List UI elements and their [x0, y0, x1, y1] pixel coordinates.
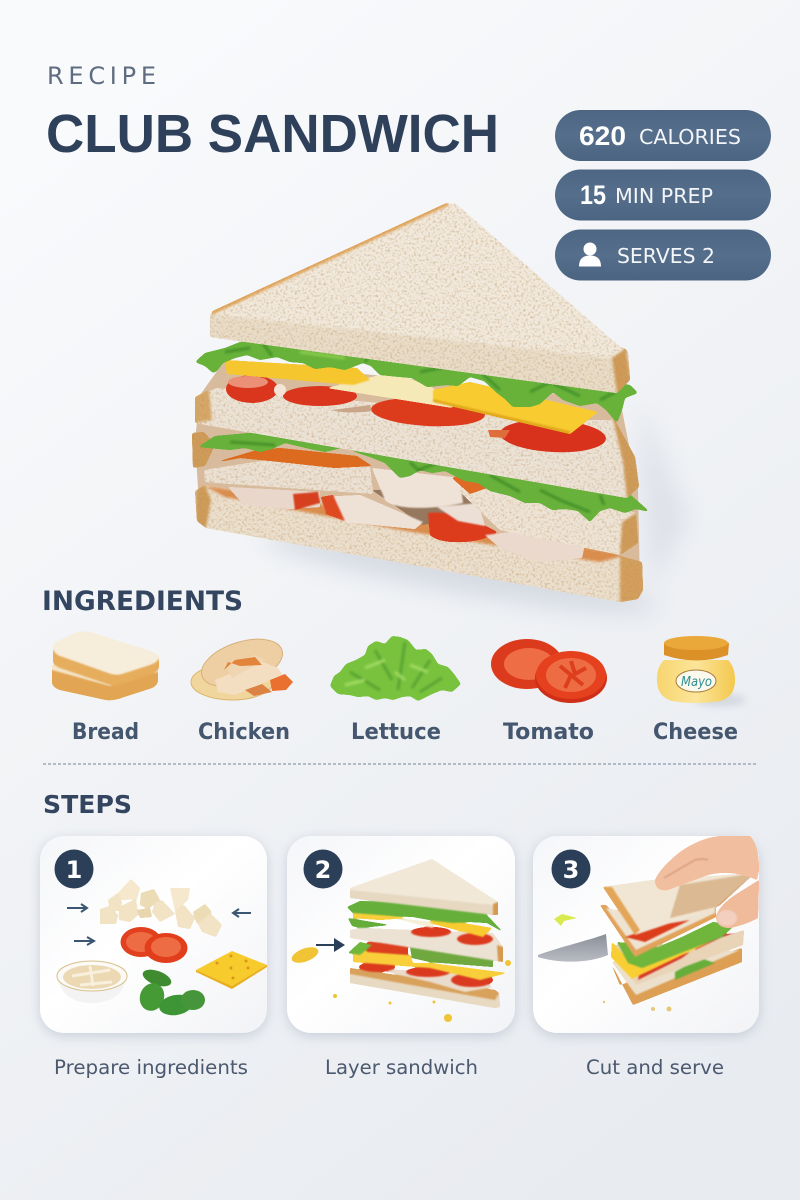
ingredient: chicken [191, 630, 293, 700]
cheese slices [225, 360, 598, 434]
step captions [54, 1056, 724, 1079]
top bread slice [210, 203, 630, 393]
ingredient names [72, 720, 738, 745]
ingredient names: Cheese [653, 720, 738, 745]
heading: recipe label: RECIPE [47, 62, 156, 90]
crumbs [603, 1001, 672, 1012]
pill: calories: CALORIES [639, 125, 741, 149]
chicken cubes [100, 879, 222, 937]
ingredient: bread [52, 632, 159, 700]
stat pills [555, 110, 771, 280]
lower lettuce [198, 432, 650, 522]
bottom bread slice [195, 485, 643, 602]
panel: step 1 [40, 836, 267, 1033]
ingredient names: Lettuce [351, 720, 441, 745]
tomato slices [120, 927, 188, 963]
pill: calories [555, 110, 771, 161]
basil leaves [136, 966, 205, 1018]
step captions: Prepare ingredients [54, 1056, 248, 1079]
bowl [57, 961, 127, 1003]
step captions: Layer sandwich [325, 1056, 478, 1079]
ingredient: mayo jar [657, 636, 746, 706]
pill: prep time: MIN PREP [615, 184, 713, 208]
ingredient: mayo jar: Mayo [681, 675, 712, 690]
step captions: Cut and serve [586, 1056, 724, 1079]
panel: step 3 [533, 836, 759, 1033]
pill: servings [555, 230, 771, 280]
heading: steps: STEPS [43, 790, 132, 819]
badge: number 2: 2 [315, 856, 331, 884]
mayo drop and crumbs [290, 944, 511, 1022]
ingredient: lettuce [330, 636, 461, 701]
badge: number 3: 3 [563, 856, 579, 884]
arrow [316, 938, 345, 952]
badge: number 1 [54, 850, 94, 888]
sparkle [554, 914, 577, 926]
cheese slice [196, 951, 267, 989]
ingredient names: Chicken [198, 720, 290, 745]
upper lettuce [195, 340, 638, 423]
layered sandwich [347, 859, 507, 1008]
pill: calories: 620 [579, 121, 626, 151]
ingredient names: Bread [72, 720, 139, 745]
knife [538, 934, 608, 962]
badge: number 3 [552, 850, 590, 888]
hand [655, 836, 759, 928]
sandwich interior backing [195, 360, 640, 600]
ingredient names: Tomato [503, 720, 594, 745]
tomato slices [226, 375, 607, 455]
sandwich being cut [600, 873, 755, 1005]
badge: number 2 [304, 850, 342, 888]
hero sandwich illustration [192, 203, 690, 626]
pill: prep time: 15 [580, 180, 606, 210]
title: CLUB SANDWICH [46, 104, 499, 164]
pill: servings: SERVES 2 [617, 244, 715, 268]
middle bread slice [195, 388, 639, 498]
arrows [67, 904, 251, 945]
lower bread halves with sauce [192, 432, 638, 555]
badge: number 1: 1 [66, 856, 82, 884]
pill: prep time [555, 170, 771, 220]
heading: ingredients: INGREDIENTS [42, 586, 243, 617]
ingredient: tomato [491, 639, 607, 703]
ingredients row [52, 630, 746, 745]
chicken and tomato filling [228, 468, 585, 562]
panel: step 2 [287, 836, 515, 1033]
